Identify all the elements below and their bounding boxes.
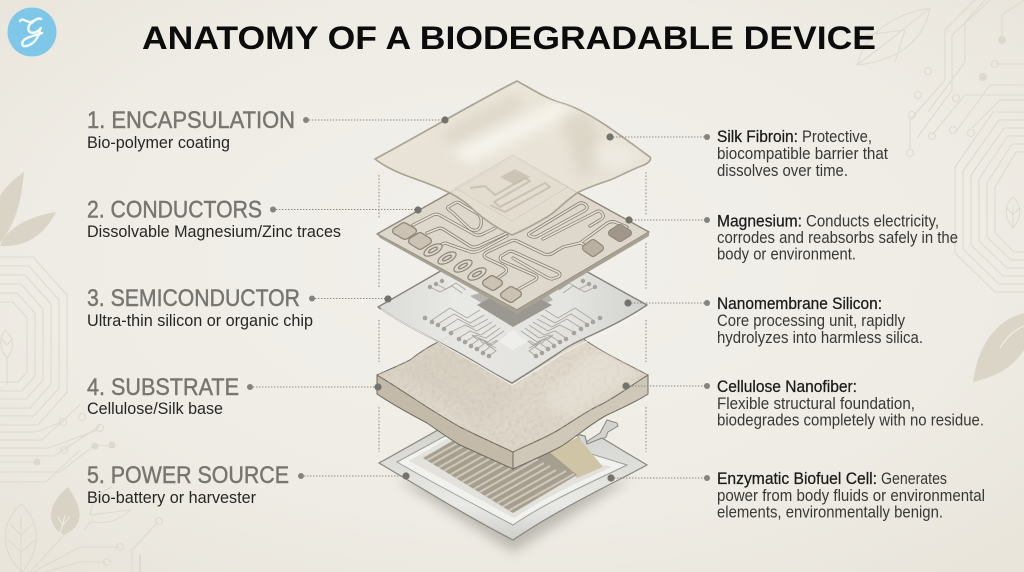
layer 1: silk fibroin encapsulation film bbox=[375, 81, 651, 235]
left label: substrate: Cellulose/Silk base bbox=[87, 400, 223, 418]
right description: enzymatic biofuel cell: power from body fluids or environmental bbox=[717, 487, 985, 505]
left label: encapsulation: Bio-polymer coating bbox=[87, 134, 230, 152]
trace fans left bbox=[423, 279, 507, 358]
background decoration: left circuit and leaves bbox=[0, 172, 162, 572]
left label: semiconductor: 3. SEMICONDUCTOR bbox=[87, 285, 300, 312]
logo badge bbox=[8, 8, 56, 56]
right description: cellulose nanofiber: Flexible structural foundation, bbox=[717, 395, 915, 413]
layer 5: power source pouch bbox=[379, 420, 647, 552]
left label: semiconductor: Ultra-thin silicon or organic chip bbox=[87, 312, 313, 330]
right description: silk fibroin: biocompatible barrier that bbox=[717, 145, 888, 163]
background decoration: right circuit and leaves bbox=[857, 0, 1024, 382]
right description: enzymatic biofuel cell: Enzymatic Biofuel Cell: bbox=[717, 470, 877, 488]
right description: enzymatic biofuel cell: Generates bbox=[881, 470, 947, 488]
left label: power source: Bio-battery or harvester bbox=[87, 489, 256, 507]
layer 4: cellulose substrate bbox=[377, 300, 648, 469]
left label: substrate: 4. SUBSTRATE bbox=[87, 374, 239, 401]
left label: power source: 5. POWER SOURCE bbox=[87, 462, 289, 489]
right description: cellulose nanofiber: biodegrades completely with no residue. bbox=[717, 412, 984, 430]
right description: magnesium: Magnesium: bbox=[717, 212, 802, 230]
right description: enzymatic biofuel cell: elements, environmentally benign. bbox=[717, 504, 943, 522]
right description: magnesium: Conducts electricity, bbox=[806, 212, 939, 230]
right description: cellulose nanofiber: Cellulose Nanofiber: bbox=[717, 378, 857, 396]
left label: encapsulation bbox=[87, 107, 295, 152]
right description: silk fibroin: Silk Fibroin: bbox=[717, 128, 798, 146]
right description: cellulose nanofiber bbox=[717, 378, 984, 430]
right description: magnesium: corrodes and reabsorbs safely in the bbox=[717, 229, 958, 247]
traces seen through film bbox=[455, 155, 568, 221]
conductor traces bbox=[413, 202, 627, 294]
right description: magnesium: body or environment. bbox=[717, 246, 856, 264]
trace fans right bbox=[518, 279, 602, 358]
left label: semiconductor bbox=[87, 285, 313, 330]
title: ANATOMY OF A BIODEGRADABLE DEVICE bbox=[142, 20, 876, 56]
layer 3: nanomembrane silicon bbox=[378, 230, 647, 385]
left label: conductors: Dissolvable Magnesium/Zinc traces bbox=[87, 223, 341, 241]
oval contact pads bbox=[422, 241, 488, 283]
right description: enzymatic biofuel cell bbox=[717, 470, 985, 522]
left label: conductors bbox=[87, 196, 341, 241]
right description: nanomembrane silicon: hydrolyzes into harmless silica. bbox=[717, 329, 923, 347]
right description: silk fibroin: dissolves over time. bbox=[717, 162, 848, 180]
leader lines and anchor dots bbox=[247, 116, 710, 482]
vertical dotted guides bbox=[379, 172, 646, 452]
left label: substrate bbox=[87, 374, 239, 418]
left label: encapsulation: 1. ENCAPSULATION bbox=[87, 107, 295, 134]
right description: magnesium bbox=[717, 212, 958, 264]
right description: silk fibroin: Protective, bbox=[802, 128, 872, 146]
right description: nanomembrane silicon bbox=[717, 295, 923, 347]
right description: nanomembrane silicon: Nanomembrane Silicon: bbox=[717, 295, 882, 313]
left label: conductors: 2. CONDUCTORS bbox=[87, 196, 262, 224]
right description: nanomembrane silicon: Core processing unit, rapidly bbox=[717, 312, 906, 330]
layer 2: magnesium conductors bbox=[377, 157, 649, 314]
contact pads bbox=[396, 226, 628, 299]
left label: power source bbox=[87, 462, 289, 507]
right description: silk fibroin bbox=[717, 128, 888, 180]
